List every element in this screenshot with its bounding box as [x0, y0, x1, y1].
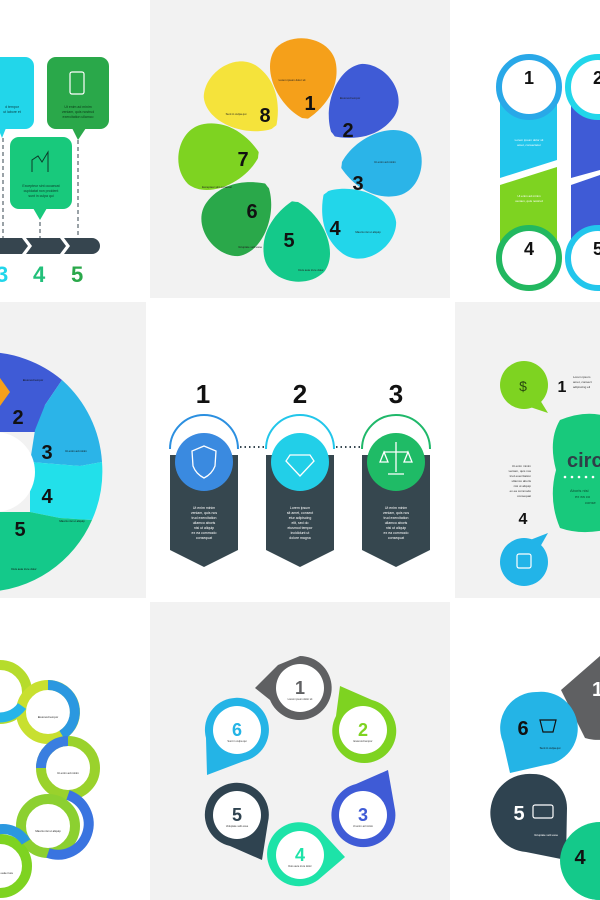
card 2: incididunt ut: [291, 531, 309, 535]
ring 1: 1: [524, 68, 534, 88]
drop 4: [267, 822, 345, 886]
panel: ring columns: [455, 0, 600, 298]
card 2: elit, sed do: [292, 521, 309, 525]
drop 2: 2: [358, 720, 368, 740]
bubble: dark green: [47, 57, 109, 140]
panel: timeline bubbles: [0, 0, 146, 298]
ring 1: [499, 57, 559, 117]
ring 4: 4: [524, 239, 534, 259]
ring 2: [568, 57, 600, 117]
panel: speech bubbles: Ut enim minim: [512, 464, 531, 468]
panel: speech bubbles: veniam, quis nos: [508, 469, 531, 473]
card 3: ex ea commodo: [384, 531, 409, 535]
bubble: cyan: d tempor: [5, 105, 20, 109]
panel: speech bubbles: [455, 302, 600, 598]
panel: flower diagram: Eiusmod tempor: [340, 96, 360, 100]
bubble 1 green: [500, 361, 548, 413]
card 1: Ut enim minim: [193, 506, 215, 510]
ring 4: [499, 228, 559, 288]
drop 1: [255, 656, 332, 720]
panel: six drop rings: Eiusmod tempor: [354, 739, 373, 743]
drop 5: 5: [232, 805, 242, 825]
card 1: ex ea commodo: [192, 531, 217, 535]
blob 4: [560, 822, 600, 900]
panel: speech bubbles: trud exercitation: [510, 474, 531, 478]
blob 1: [561, 656, 600, 740]
petal numbers: 5: [283, 230, 295, 252]
card 3: ullamco aboris: [385, 521, 408, 525]
blob 4: 4: [574, 847, 586, 869]
drop 5: [205, 783, 269, 860]
central blob: conse: [585, 500, 596, 505]
blob 6: Sunt in culpa qui: [540, 746, 561, 750]
panel: speech bubbles: consequat: [517, 494, 531, 498]
card 3: trud exercitation: [384, 516, 409, 520]
panel: speech bubbles: Lorem ipsum: [573, 375, 591, 379]
card 3: nisi ut aliquip: [386, 526, 406, 530]
panel: donut: 5: [14, 519, 26, 541]
panel: six drop rings: Duis aute irure dolor: [288, 864, 312, 868]
panel: flower diagram: Lorem ipsum dolor sit: [279, 78, 306, 82]
petal numbers: 6: [246, 201, 258, 223]
bubble: mid green: Excepteur sint occaecat: [22, 184, 60, 188]
panel: speech bubbles: nisi ut aliquip: [514, 484, 531, 488]
blob 5: [490, 774, 567, 860]
panel: ring columns: veniam, quis nostrud: [515, 199, 543, 203]
panel: petal bubbles: [455, 602, 600, 900]
panel: donut: Mauris nisi ut aliquip: [59, 519, 85, 523]
panel: flower diagram: Ut enim ad minim: [374, 160, 397, 164]
card 3: [362, 433, 430, 567]
petal numbers: [237, 93, 364, 252]
panel: speech bubbles: ullamco aboris: [512, 479, 531, 483]
drop 6: [205, 698, 269, 775]
central blob: Aboris nisi: [570, 488, 589, 493]
panel: donut: Duis aute irure dolor: [11, 567, 37, 571]
panel: ring columns: amet, consectetur: [517, 143, 541, 147]
card 3: consequat: [388, 536, 404, 540]
central blob: ex ea co: [575, 494, 591, 499]
panel: ring chain: Eiusmod tempor: [38, 715, 58, 719]
panel: six drop rings: Sunt in culpa qui: [227, 739, 247, 743]
bubble: mid green: cupidatat non proident: [24, 189, 58, 193]
card 2: eiusmod tempor: [287, 526, 313, 530]
panel: ring columns: Lorem ipsum dolor sit: [515, 138, 544, 142]
panel: speech bubbles: adipiscing eli: [573, 385, 591, 389]
panel: speech bubbles: amet, consect: [573, 380, 592, 384]
panel: six drop rings: [150, 602, 450, 900]
card 2: [266, 433, 334, 567]
arrow: timeline bar: [0, 238, 100, 254]
petal numbers: 7: [237, 149, 249, 171]
numbers: 4: [33, 262, 46, 287]
bubble: mid green: [10, 137, 72, 220]
bubble: mid green: sunt in culpa qui: [28, 194, 54, 198]
numbers: 5: [71, 262, 83, 287]
card 1: trud exercitation: [192, 516, 217, 520]
card 1: consequat: [196, 536, 212, 540]
panel: three cards: [150, 302, 450, 598]
card 2: Lorem ipsum: [290, 506, 310, 510]
card 2: dolore magna: [289, 536, 311, 540]
panel: three cards: 3: [389, 379, 403, 409]
panel: flower diagram: [150, 0, 450, 298]
card 3: veniam, quis nos: [383, 511, 409, 515]
petal numbers: 8: [259, 105, 271, 127]
panel: three cards: 2: [293, 379, 307, 409]
petal numbers: 3: [352, 173, 364, 195]
panel: speech bubbles: 1: [558, 379, 567, 396]
panel: donut: 2: [12, 407, 24, 429]
panel: six drop rings: Voluptate velit esse: [226, 824, 249, 828]
drop 2: [332, 686, 396, 763]
panel: flower diagram: Excepteur sint occaecat: [202, 185, 232, 189]
bubble: cyan: ut labore et: [3, 110, 21, 114]
card 1: [170, 433, 238, 567]
bubble 4 blue: [500, 533, 548, 586]
panel: ring columns: Ut enim ad minim: [517, 194, 541, 198]
blob 6: 6: [517, 718, 529, 740]
panel: six drop rings: Ut enim ad minim: [353, 824, 373, 828]
bubble 1 green: $: [519, 378, 527, 394]
bubble: dark green: veniam, quis nostrud: [62, 110, 94, 114]
panel: speech bubbles: ex ea commodo: [510, 489, 531, 493]
panel: donut: 4: [41, 486, 53, 508]
ring 5: [568, 228, 600, 288]
panel: flower diagram: Sunt in culpa qui: [226, 112, 247, 116]
blob 6: [500, 692, 578, 773]
petal numbers: 4: [329, 218, 341, 240]
card 2: sit amet, consect: [287, 511, 313, 515]
drop 6: 6: [232, 720, 242, 740]
numbers: [0, 262, 83, 287]
bubble: cyan: [0, 57, 34, 138]
panel: six drop rings: Lorem ipsum dolor sit: [288, 697, 313, 701]
panel: ring chain: [0, 602, 146, 900]
panel: flower diagram: Mauris nisi ut aliquip: [355, 230, 381, 234]
panel: speech bubbles: 4: [519, 511, 528, 528]
card 1: nisi ut aliquip: [194, 526, 214, 530]
panel: ring chain: Mauris nisi ut aliquip: [35, 829, 61, 833]
panel: three cards: 1: [196, 379, 210, 409]
petal numbers: 1: [304, 93, 316, 115]
blob 5: 5: [513, 803, 525, 825]
card 2: etur adipiscing: [289, 516, 311, 520]
card 3: Ut enim minim: [385, 506, 407, 510]
bubble: dark green: Ut enim ad minim: [64, 105, 92, 109]
bubble: dark green: exercitation ullamco: [63, 115, 94, 119]
panel: donut: Eiusmod tempor: [23, 378, 43, 382]
drop 3: 3: [358, 805, 368, 825]
drop 3: [331, 770, 395, 847]
drop 1: 1: [295, 678, 305, 698]
panel: flower diagram: Duis aute irure dolor: [298, 268, 324, 272]
petal numbers: 2: [342, 120, 354, 142]
panel: flower diagram: Voluptate velit esse: [238, 245, 262, 249]
card 1: veniam, quis nos: [191, 511, 217, 515]
blob 5: Voluptate velit esse: [534, 833, 558, 837]
panel: donut: [0, 302, 146, 598]
central blob: [553, 414, 600, 532]
panel: ring chain: Ut enim ad minim: [57, 771, 80, 775]
panel: donut: Ut enim ad minim: [65, 449, 88, 453]
card 1: ullamco aboris: [193, 521, 216, 525]
panel: donut: 3: [41, 442, 53, 464]
drop 4: 4: [295, 845, 305, 865]
